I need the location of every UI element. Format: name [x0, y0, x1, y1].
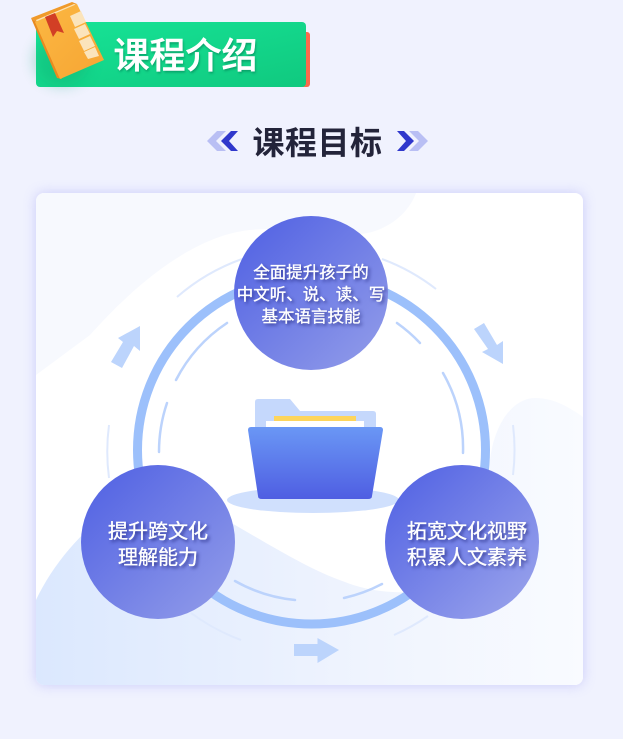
heading text: 课程目标 [252, 125, 383, 161]
banner title: 课程介绍 [114, 35, 258, 76]
goal circle: language skills [234, 216, 388, 370]
icon: folder [227, 399, 399, 513]
goal text: 中文听、说、读、写 [237, 286, 385, 304]
icon: left chevrons [207, 131, 238, 151]
goal text: 提升跨文化 [108, 520, 208, 542]
subheading: course goals [207, 125, 428, 161]
goal circle: cross-cultural understanding [81, 464, 235, 618]
goal text [237, 264, 388, 328]
icon: right chevrons [397, 131, 428, 151]
goal text [108, 520, 211, 570]
arrow: down-right [474, 323, 503, 364]
goal text: 基本语言技能 [262, 308, 360, 326]
section banner [26, 2, 310, 94]
icon: book [31, 2, 104, 79]
panel: course goals cycle [36, 193, 583, 685]
goal text: 理解能力 [118, 546, 198, 568]
cycle diagram [36, 258, 536, 685]
goal text: 拓宽文化视野 [407, 520, 527, 542]
outer dashes [107, 259, 515, 640]
arrow: up-right [111, 326, 140, 368]
inner dashes [159, 323, 463, 600]
goal text [407, 520, 530, 570]
main ring [138, 276, 486, 624]
banner background [26, 2, 310, 94]
goal text: 积累人文素养 [407, 546, 527, 568]
goal circle: broaden cultural horizons [385, 464, 539, 618]
goal text: 全面提升孩子的 [253, 264, 369, 282]
arrow: right [294, 638, 339, 663]
